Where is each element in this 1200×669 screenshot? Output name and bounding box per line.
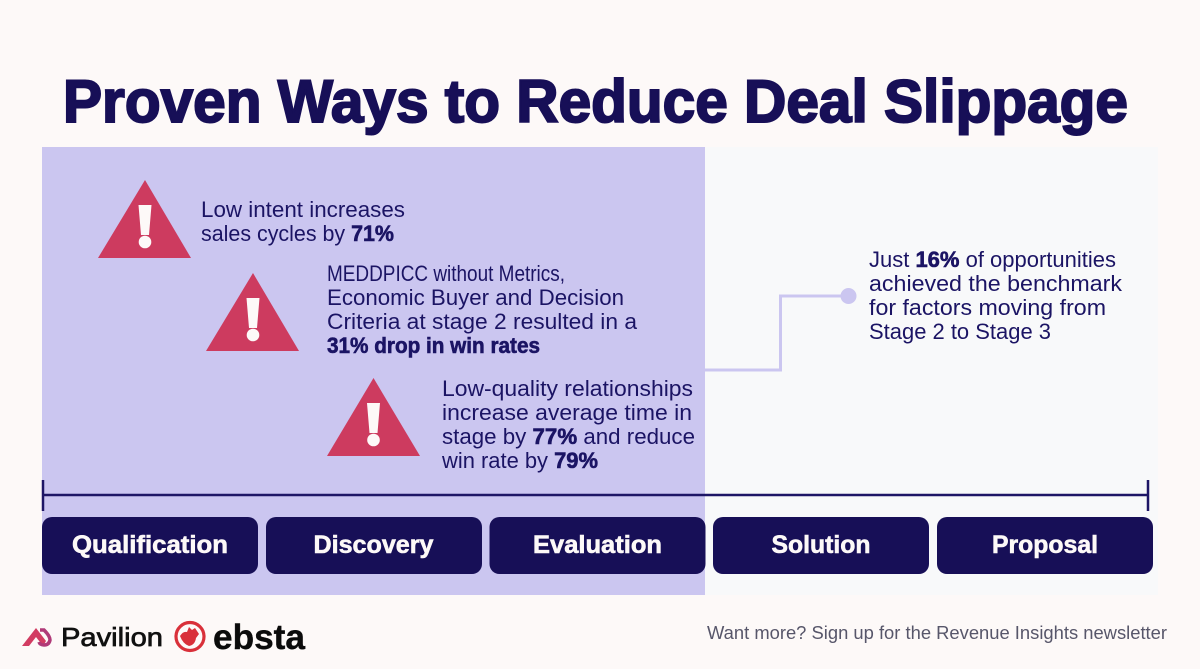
logo: Pavilion: Pavilion: [61, 622, 163, 652]
text: low-quality relationships: stage by 77% and reduce: [442, 424, 695, 449]
stage: Solution: [713, 517, 929, 574]
logo: ebsta: ebsta: [213, 618, 306, 657]
stage: Discovery: Discovery: [314, 531, 434, 559]
timeline axis: [43, 480, 1148, 511]
connector line with dot: [705, 288, 856, 370]
text: low intent: sales cycles by 71%: [201, 221, 394, 246]
newsletter text: Want more? Sign up for the Revenue Insights newsletter: [707, 623, 1167, 643]
stage: Evaluation: [490, 517, 706, 574]
title: Proven Ways to Reduce Deal Slippage: [63, 68, 1128, 135]
stage: Discovery: [266, 517, 482, 574]
text: low-quality relationships: [441, 376, 695, 473]
logo: Pavilion: [22, 622, 163, 652]
text: low-quality relationships: Low-quality relationships: [442, 376, 693, 401]
stage: Proposal: [937, 517, 1153, 574]
stage: Solution: Solution: [772, 531, 870, 559]
text: 16% callout: achieved the benchmark: [869, 271, 1123, 296]
text: MEDDPICC: Economic Buyer and Decision: [327, 285, 624, 310]
stage: Qualification: Qualification: [72, 531, 228, 559]
text: low intent: Low intent increases: [201, 197, 405, 222]
panel: left stages highlight: [42, 147, 705, 595]
stage: Qualification: [42, 517, 258, 574]
text: 16% callout: Stage 2 to Stage 3: [869, 319, 1051, 344]
text: 16% callout: for factors moving from: [869, 295, 1106, 320]
icon: warning triangle 3: [327, 378, 420, 456]
text: MEDDPICC: Criteria at stage 2 resulted in a: [327, 309, 638, 334]
icon: warning triangle 2: [206, 273, 299, 351]
text: low-quality relationships: win rate by 79%: [441, 448, 598, 473]
text: MEDDPICC: 31% drop in win rates: [327, 333, 540, 358]
icon: warning triangle 1: [98, 180, 191, 258]
text: 16% callout: Just 16% of opportunities: [869, 247, 1116, 272]
text: low intent: [201, 197, 405, 246]
text: 16% callout: [869, 247, 1123, 344]
text: MEDDPICC: [327, 261, 638, 358]
stage: Evaluation: Evaluation: [533, 531, 662, 559]
text: MEDDPICC: MEDDPICC without Metrics,: [327, 261, 565, 286]
panel: right stages background: [705, 147, 1158, 595]
text: low-quality relationships: increase average time in: [442, 400, 692, 425]
stage: Proposal: Proposal: [992, 531, 1098, 559]
